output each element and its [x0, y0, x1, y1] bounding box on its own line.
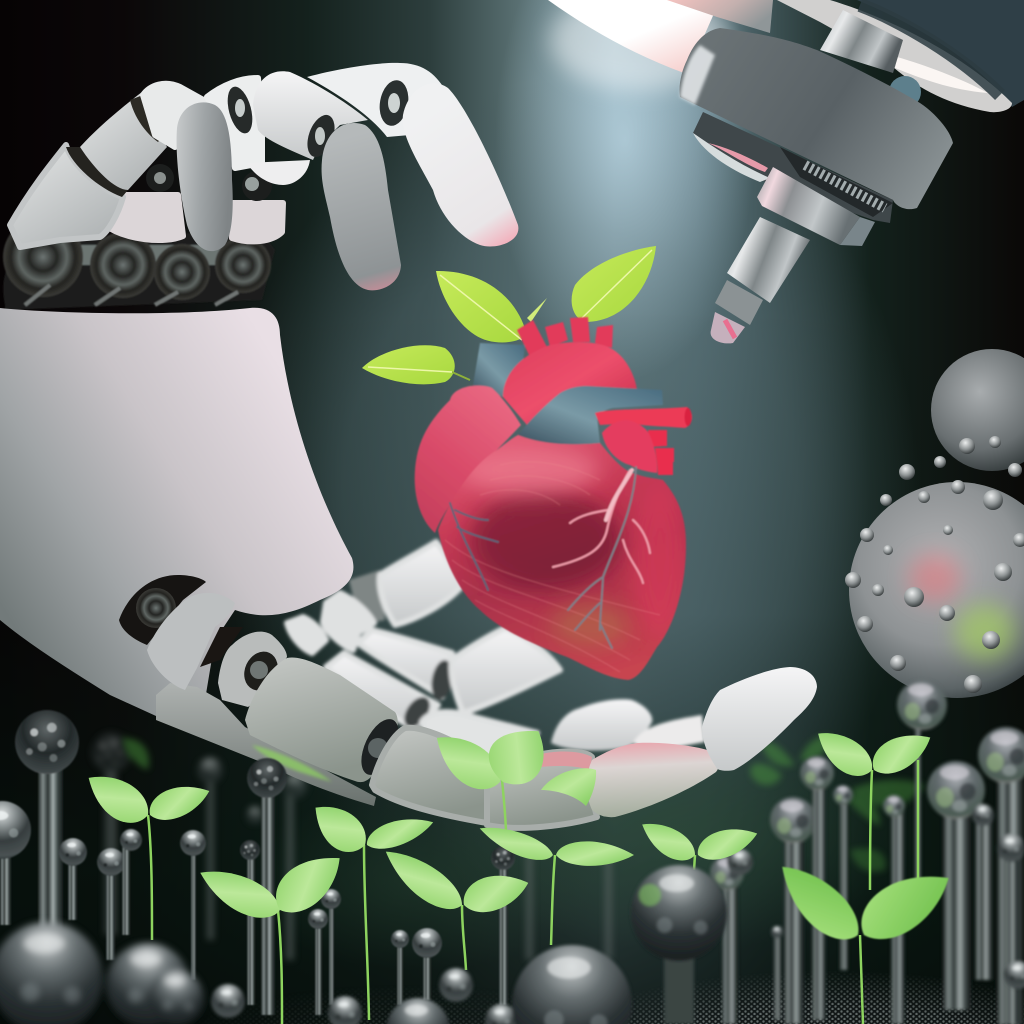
finger one [10, 84, 207, 247]
objective barrel [727, 217, 810, 303]
lower robot thumb and fingers front [245, 657, 817, 828]
top vessels [517, 317, 613, 357]
large foreground seedling [767, 853, 961, 953]
silver column [820, 10, 903, 73]
spiked metal sphere [845, 436, 1024, 698]
coronary vessels [450, 467, 650, 648]
green seedlings [78, 714, 961, 1024]
sphere spikes [845, 436, 1024, 693]
small right stubs [648, 430, 674, 475]
glow behind [550, 0, 730, 90]
silver nut [757, 167, 860, 245]
knuckle joint [218, 632, 287, 707]
dark slot [200, 627, 243, 667]
green glow strip [252, 745, 332, 782]
left lobe [415, 386, 521, 533]
anatomical heart [415, 317, 692, 680]
wrist socket [119, 575, 206, 645]
main ventricle [438, 435, 686, 680]
right atrium [602, 420, 657, 473]
knurled ring [715, 280, 763, 325]
midground pins left [0, 710, 515, 1015]
foreground chrome spheres [0, 865, 1024, 1024]
ventricle shading [445, 446, 690, 672]
mechanical knuckle joints [3, 217, 275, 310]
seedling stems [148, 760, 918, 1024]
robot arm: upper hand [3, 63, 518, 310]
microscope head [548, 0, 1024, 343]
lower wrist band [156, 683, 376, 806]
blue vessel [518, 386, 663, 444]
robot forearm and palm [0, 308, 376, 806]
back grey sphere [931, 349, 1024, 471]
second tier lens ring [693, 112, 893, 223]
aorta arch [503, 342, 637, 425]
finger four [307, 63, 518, 246]
objective tip [711, 312, 745, 343]
housing back [857, 0, 1024, 107]
right red tube [595, 407, 692, 428]
wrist cuff [147, 593, 235, 690]
midground pins right [710, 680, 1024, 1024]
housing piece [667, 0, 773, 33]
seedling leaves [78, 714, 937, 927]
leaves above the heart [362, 246, 656, 384]
main collar [679, 28, 953, 209]
light ring [548, 0, 1012, 112]
background out-of-focus pins and plants [91, 732, 925, 960]
pulmonary vessel [473, 343, 525, 397]
lower robot fingers back row [287, 542, 705, 765]
finger two [177, 78, 283, 251]
finger three [247, 71, 401, 290]
